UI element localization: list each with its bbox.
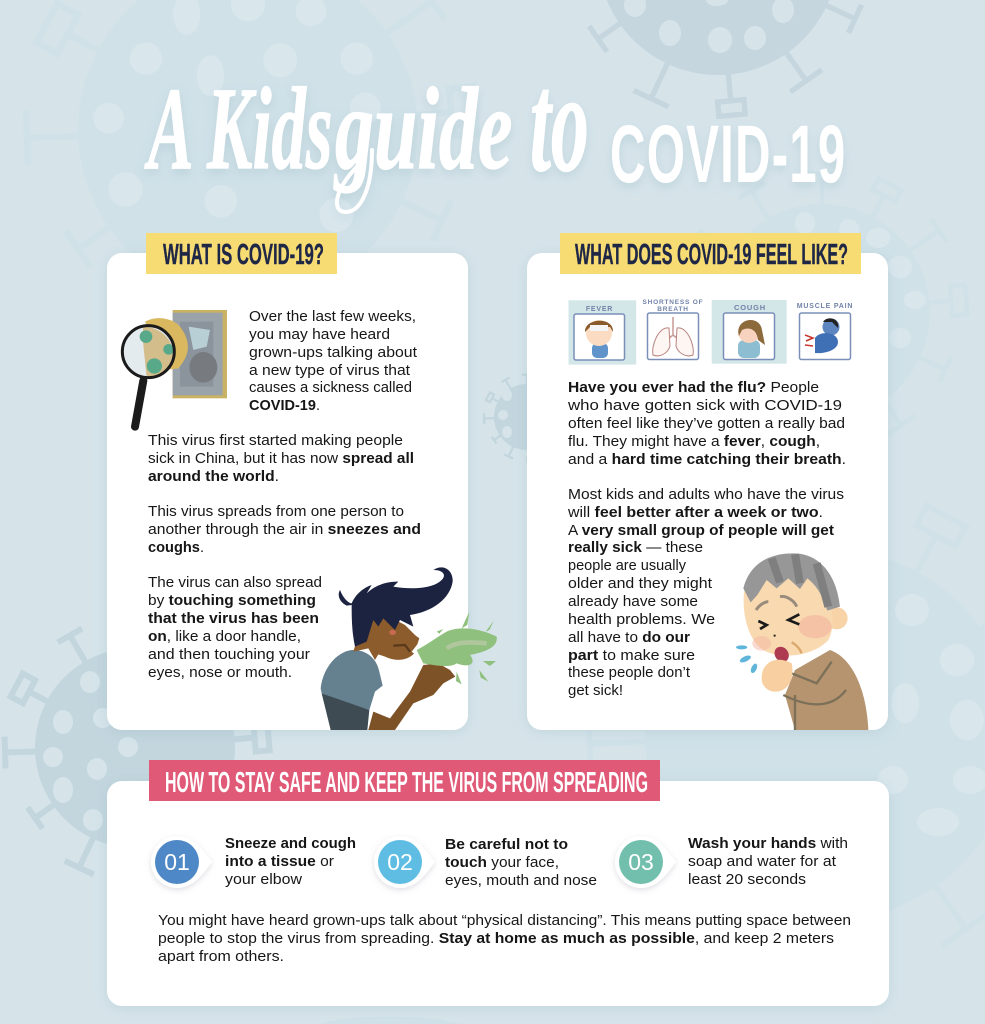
text block: flu: Have you ever had the flu? People <box>568 379 819 396</box>
card <box>107 781 889 1006</box>
text block: physical distancing: people to stop the virus from spreading. Stay at home as much as possible , and keep 2 meters <box>158 930 834 947</box>
text block: intro: Over the last few weeks, <box>249 308 416 325</box>
text block: recovery: all have to do our <box>568 629 690 646</box>
background virus: large top left <box>26 0 477 359</box>
panel: what is covid-19 <box>107 233 497 730</box>
icon: cough: COUGH <box>734 303 766 312</box>
card <box>107 253 468 730</box>
title flourish: g loop <box>337 150 372 212</box>
text block: touching: eyes, nose or mouth. <box>148 664 292 681</box>
title <box>144 44 845 212</box>
step text: touch your face, <box>445 854 559 871</box>
text block: spread in air: This virus spreads from one person to <box>148 503 404 520</box>
step 03 <box>615 835 848 888</box>
title word: COVID-19: COVID-19 <box>610 109 845 200</box>
icon: shortness of breath: SHORTNESS OF <box>643 299 703 306</box>
step text: your elbow <box>225 871 302 888</box>
text block: flu: and a hard time catching their breath . <box>568 451 846 468</box>
text block: touching <box>148 574 322 681</box>
text block: recovery: A very small group of people will get <box>568 522 834 539</box>
text block: physical distancing <box>158 912 851 965</box>
text block: intro: you may have heard <box>249 326 390 343</box>
text block: spread around world: sick in China, but it has now spread all <box>148 450 414 467</box>
step text: Sneeze and cough <box>225 835 356 852</box>
text block: flu: who have gotten sick with COVID-19 <box>567 397 842 414</box>
text block: recovery: part to make sure <box>568 647 695 664</box>
title word: to: to <box>530 44 589 201</box>
text block: intro: a new type of virus that <box>249 362 411 379</box>
text block: recovery: really sick — these <box>568 539 703 556</box>
step 02 <box>374 836 597 889</box>
text block: flu <box>567 379 846 468</box>
background virus: bottom centre <box>320 1016 460 1024</box>
heading <box>146 233 337 274</box>
badge 02 <box>374 836 435 888</box>
panel: how to stay safe <box>107 760 889 1006</box>
icon: fever: FEVER <box>586 306 613 313</box>
background virus: bottom right <box>589 498 985 984</box>
background virus: small centre <box>484 375 571 461</box>
icon: muscle pain <box>797 303 853 360</box>
text block: physical distancing: apart from others. <box>158 948 284 965</box>
heading <box>149 760 660 801</box>
background virus: right middle <box>681 174 967 457</box>
step text: Wash your hands with <box>688 835 848 852</box>
heading <box>560 233 861 274</box>
text block: spread around world: around the world . <box>148 468 279 485</box>
text block: spread in air: coughs. <box>148 539 204 556</box>
text block: touching: The virus can also spread <box>148 574 322 591</box>
text block: recovery: already have some <box>568 593 698 610</box>
step 01 <box>151 835 356 888</box>
badge 03: 03 <box>628 849 654 875</box>
step text <box>445 836 597 889</box>
step text: soap and water for at <box>688 853 837 870</box>
heading: WHAT IS COVID-19? <box>163 239 324 271</box>
step text: into a tissue or <box>225 853 334 870</box>
icon: muscle pain: MUSCLE PAIN <box>797 303 853 310</box>
step text: least 20 seconds <box>688 871 806 888</box>
step text <box>688 835 848 888</box>
text block: intro: causes a sickness called <box>249 379 412 396</box>
background virus: top right <box>561 0 880 116</box>
text block: spread in air: another through the air in sneezes and <box>148 521 421 538</box>
icon: shortness of breath: BREATH <box>657 306 689 313</box>
text block: touching: by touching something <box>148 592 316 609</box>
panel: what does covid-19 feel like <box>527 233 888 730</box>
text block: flu: often feel like they’ve gotten a really bad <box>568 415 845 432</box>
text block: spread in air <box>148 503 421 556</box>
icon: magnifying glass on door handle <box>122 310 227 427</box>
text block: touching: that the virus has been <box>148 610 319 627</box>
text block: recovery: get sick! <box>568 682 623 699</box>
icon: boy sneezing <box>321 567 497 730</box>
text block: touching: on, like a door handle, <box>148 628 301 645</box>
title word: guide: guide <box>333 63 512 194</box>
text block: recovery <box>567 486 844 699</box>
text block: flu: flu. They might have a fever, cough, <box>568 433 820 450</box>
text block: intro: grown-ups talking about <box>249 344 418 361</box>
step text: Be careful not to <box>445 836 568 853</box>
step text <box>225 835 356 888</box>
text block: recovery: will feel better after a week or two . <box>567 504 823 521</box>
text block: recovery: health problems. We <box>568 611 715 628</box>
text block: recovery: people are usually <box>568 557 686 574</box>
text block: spread around world: This virus first started making people <box>148 432 403 449</box>
text block: recovery: these people don’t <box>568 664 691 681</box>
icon: cough <box>712 300 787 364</box>
text block: physical distancing: You might have heard grown-ups talk about “physical distancing”. This means putting space between <box>158 912 851 929</box>
background virus: bottom left <box>5 620 270 882</box>
card <box>527 253 888 730</box>
text block: intro: COVID-19. <box>249 397 320 414</box>
text block: intro <box>249 308 418 414</box>
text block: spread around world <box>148 432 414 485</box>
step text: eyes, mouth and nose <box>445 872 597 889</box>
icon: shortness of breath <box>643 299 703 360</box>
text block: recovery: Most kids and adults who have the virus <box>568 486 844 503</box>
badge 01: 01 <box>164 849 190 875</box>
badge 01 <box>151 836 212 888</box>
title word: A Kids: A Kids <box>144 63 332 194</box>
badge 03 <box>615 836 676 888</box>
icon: fever <box>568 300 636 365</box>
badge 02: 02 <box>387 849 413 875</box>
text block: recovery: older and they might <box>568 575 713 592</box>
text block: touching: and then touching your <box>148 646 310 663</box>
icon: old man coughing <box>736 553 868 730</box>
